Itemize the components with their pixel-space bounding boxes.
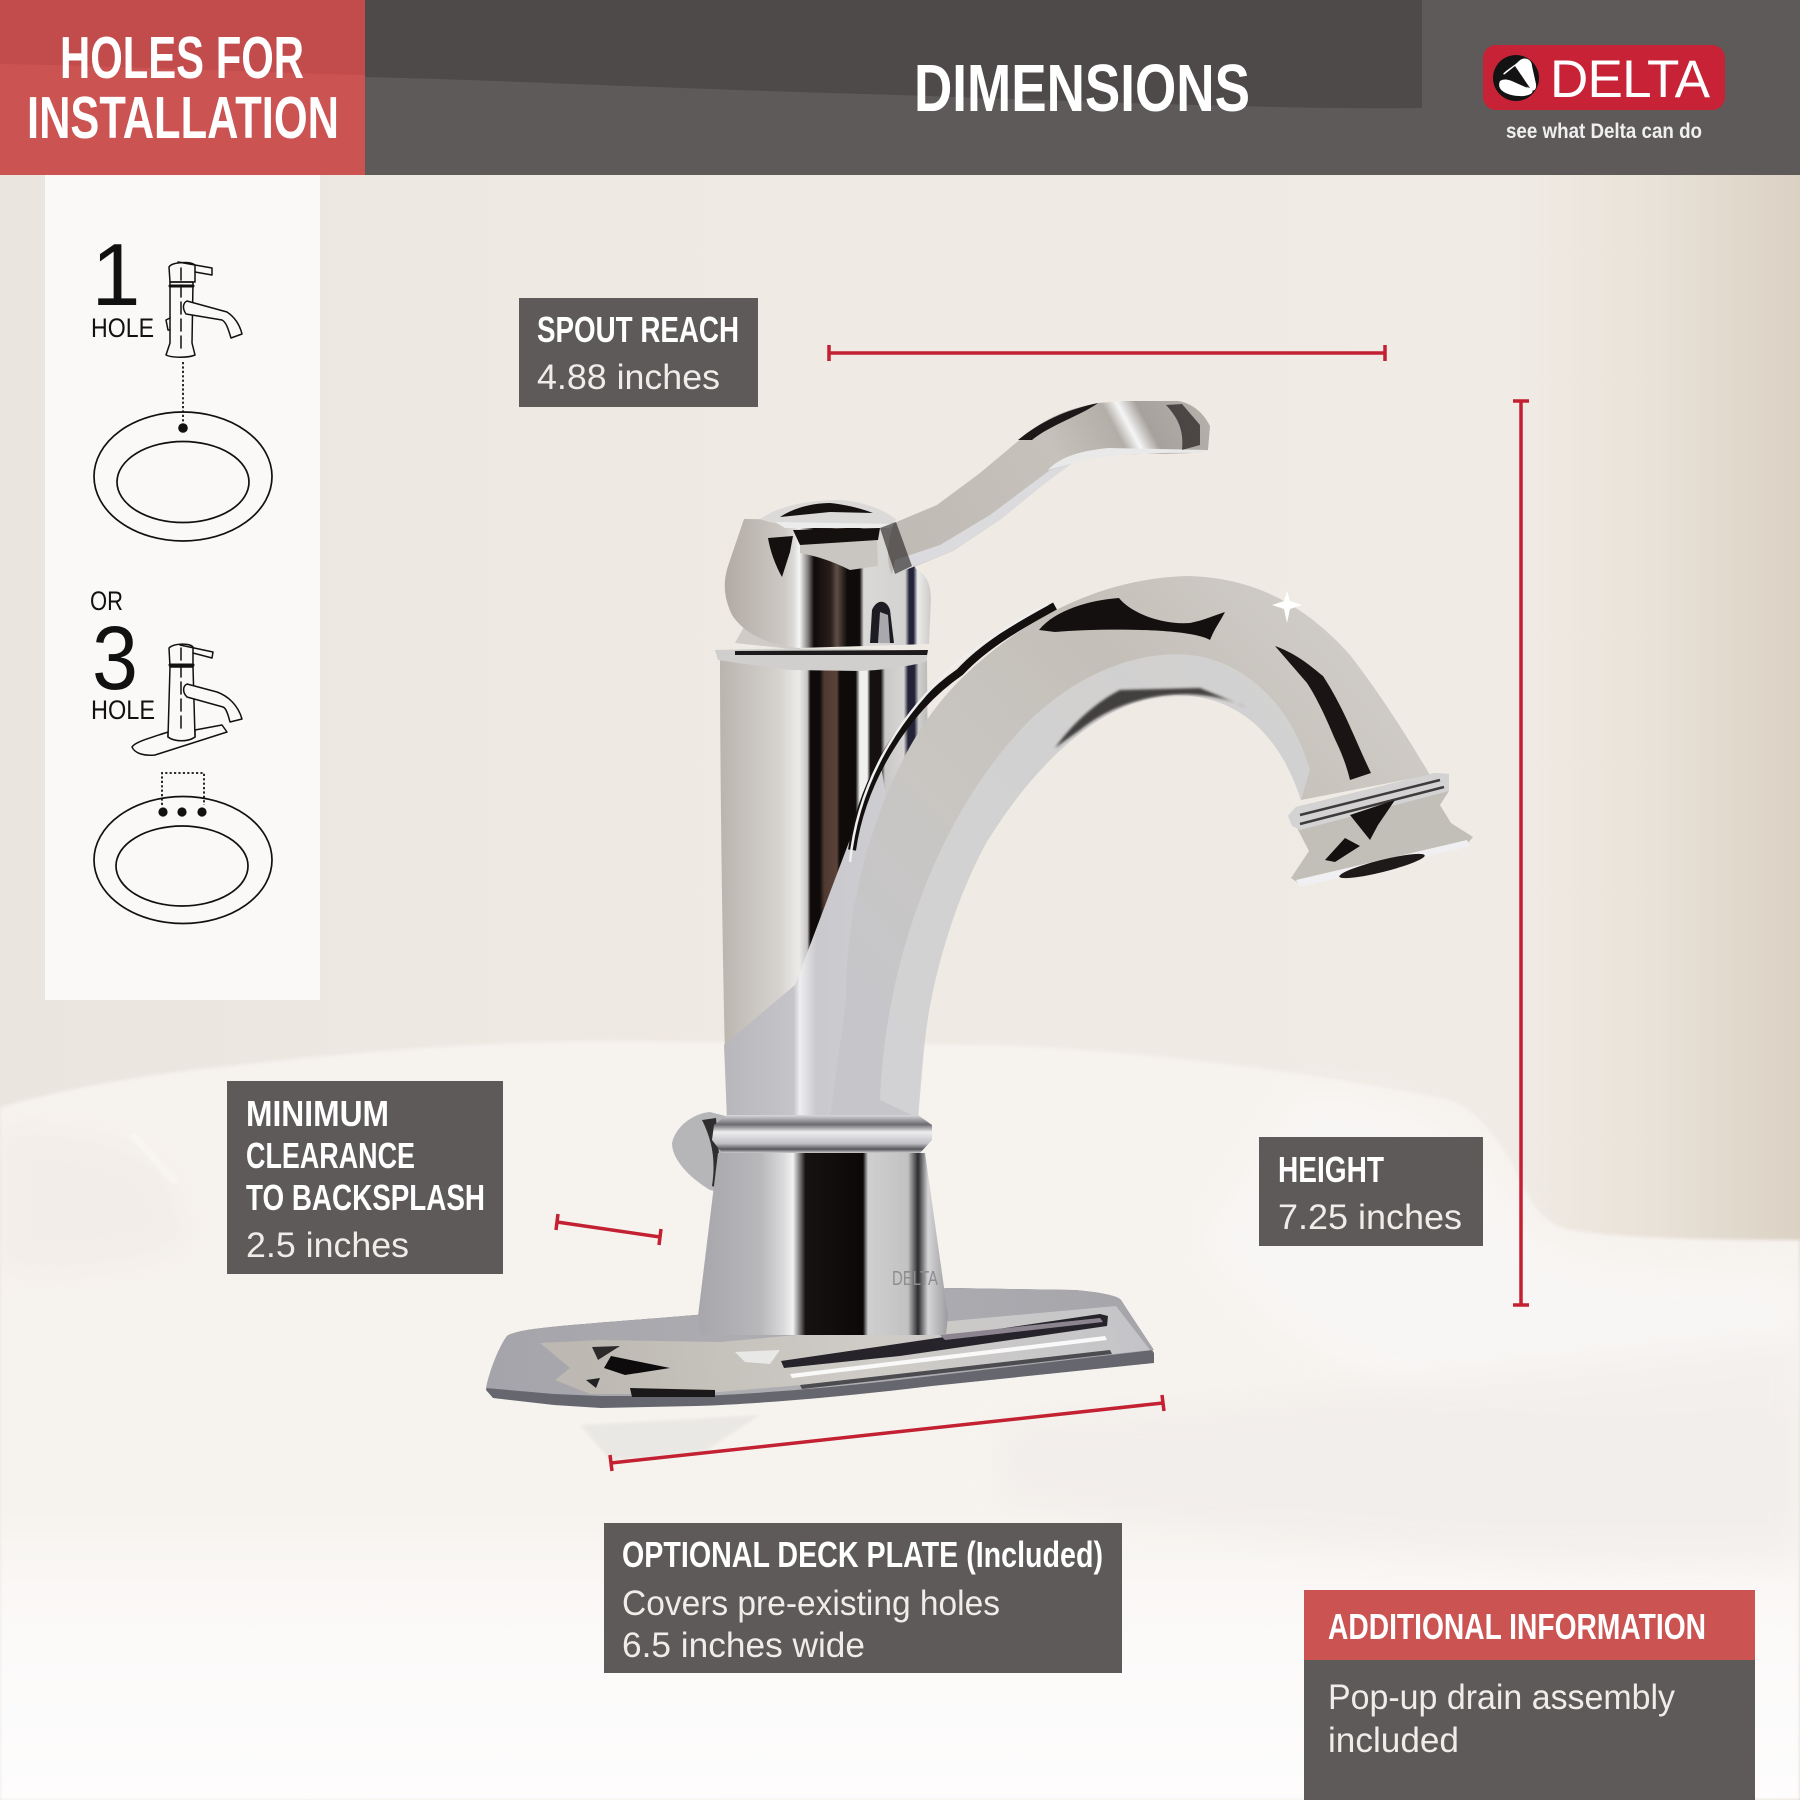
callout: minimum clearance: MINIMUM <box>246 1093 389 1134</box>
icon: delta triangle mark <box>1493 55 1539 101</box>
three-hole label: HOLE <box>91 695 155 725</box>
dimension line: backsplash clearance <box>556 1214 661 1245</box>
base collar ring <box>712 1115 932 1153</box>
deck plate <box>486 1288 1154 1408</box>
callout: minimum clearance: 2.5 inches <box>246 1226 409 1265</box>
one-hole label: 1 <box>92 225 140 324</box>
callout: minimum clearance: CLEARANCE <box>246 1135 415 1176</box>
panel: additional information: ADDITIONAL INFORMATION <box>1328 1606 1706 1647</box>
callout: minimum clearance <box>227 1081 503 1274</box>
header panel: holes for installation: INSTALLATION <box>27 85 339 151</box>
one-hole label: HOLE <box>91 313 154 343</box>
icon: one-hole sink <box>94 362 272 541</box>
icon: one-hole faucet <box>166 262 242 357</box>
lever handle <box>880 401 1210 575</box>
callout: spout reach: SPOUT REACH <box>537 309 739 350</box>
drain lift knob <box>672 1112 729 1193</box>
Delta logo <box>1483 45 1725 143</box>
callout: spout reach <box>519 298 758 407</box>
Delta logo: see what Delta can do <box>1506 120 1702 143</box>
panel: hole options <box>45 175 320 1000</box>
callout: optional deck plate: 6.5 inches wide <box>622 1626 865 1665</box>
callout: optional deck plate <box>604 1523 1122 1673</box>
DELTA engraving: DELTA <box>892 1268 938 1290</box>
dimension line: height <box>1513 401 1529 1305</box>
callout: spout reach: 4.88 inches <box>537 358 720 397</box>
header panel: holes for installation <box>0 0 365 175</box>
handle hub <box>715 500 931 671</box>
faucet body column <box>720 660 928 1118</box>
callout: minimum clearance: TO BACKSPLASH <box>246 1177 485 1218</box>
callout: optional deck plate: Covers pre-existing holes <box>622 1584 1000 1623</box>
header panel: holes for installation: HOLES FOR <box>60 25 304 91</box>
icon: three-hole sink <box>94 773 272 924</box>
one-hole label <box>91 225 154 343</box>
panel: additional information: included <box>1328 1721 1459 1760</box>
callout: height: 7.25 inches <box>1278 1198 1462 1237</box>
panel: additional information <box>1304 1590 1755 1800</box>
tapered base cone <box>698 1153 948 1335</box>
three-hole label: OR <box>90 586 123 616</box>
panel: additional information: Pop-up drain assembly <box>1328 1678 1675 1717</box>
lower body silver reflection <box>724 760 925 1118</box>
Delta logo: DELTA <box>1550 50 1711 109</box>
callout: optional deck plate: OPTIONAL DECK PLATE (Included) <box>622 1534 1103 1575</box>
curved spout <box>830 576 1430 1118</box>
dimension line: deck plate width <box>610 1395 1164 1471</box>
heading: dimensions: DIMENSIONS <box>914 51 1250 126</box>
faucet photo illustration <box>486 401 1473 1408</box>
callout: height <box>1259 1137 1483 1246</box>
icon: three-hole faucet with deck plate <box>132 644 242 755</box>
spout nozzle <box>1288 773 1473 887</box>
three-hole label <box>90 586 155 725</box>
three-hole label: 3 <box>92 609 138 709</box>
header: background bar <box>365 0 1800 175</box>
callout: height: HEIGHT <box>1278 1149 1384 1190</box>
dimension line: spout reach <box>829 345 1385 361</box>
